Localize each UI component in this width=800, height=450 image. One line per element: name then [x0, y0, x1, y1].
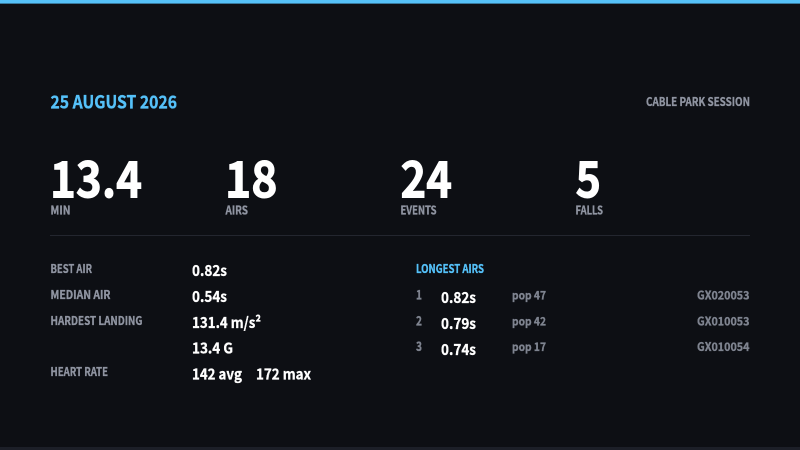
metric: hardest landing: 131.4 m/s² [192, 312, 261, 333]
row 2: 0.79s [441, 313, 476, 334]
bottom bar [0, 447, 800, 450]
metric: hardest landing: HARDEST LANDING [50, 312, 142, 329]
stat row [50, 140, 603, 218]
metric: hardest landing [50, 312, 261, 358]
metric: median air [50, 286, 227, 307]
date heading: 25 AUGUST 2026 [50, 88, 177, 114]
row 1: 1 [416, 284, 422, 304]
metric: heart rate: 172 max [256, 364, 312, 384]
session metrics [50, 260, 312, 384]
row 3: 0.74s [441, 339, 476, 360]
metric: best air [50, 260, 227, 281]
metric: heart rate [50, 363, 312, 384]
stat: minutes: MIN [50, 202, 70, 218]
metric: median air: 0.54s [192, 286, 227, 307]
top accent bar [0, 0, 800, 4]
stat: events: 24 [400, 140, 452, 212]
stat: falls: 5 [576, 140, 601, 212]
row 3: GX010054 [697, 338, 750, 355]
row 2: 2 [416, 310, 422, 330]
row 3: 3 [416, 336, 422, 355]
metric: heart rate: HEART RATE [50, 363, 108, 380]
stat: airs: 18 [225, 140, 278, 212]
metric: hardest landing: 13.4 G [192, 338, 233, 358]
metric: median air: MEDIAN AIR [50, 286, 110, 303]
row 2: pop 42 [512, 312, 546, 330]
longest airs list [416, 260, 750, 360]
row 3 [416, 336, 750, 360]
metric: heart rate: 142 avg [192, 364, 242, 384]
metric: best air: 0.82s [192, 260, 227, 281]
stat: airs: AIRS [225, 202, 248, 218]
row 1: GX020053 [697, 286, 750, 304]
session title: CABLE PARK SESSION [646, 93, 750, 110]
row 1: pop 47 [512, 286, 546, 304]
row 1: 0.82s [441, 287, 476, 308]
row 3: pop 17 [512, 338, 546, 355]
list heading: LONGEST AIRS [416, 260, 484, 277]
metric: best air: BEST AIR [50, 260, 92, 277]
row 1 [416, 284, 750, 308]
row 2: GX010053 [697, 312, 750, 330]
row 2 [416, 310, 750, 334]
header [50, 88, 750, 114]
stat: falls: FALLS [576, 202, 603, 218]
stat: events: EVENTS [400, 202, 436, 218]
stat: minutes: 13.4 [50, 140, 142, 212]
